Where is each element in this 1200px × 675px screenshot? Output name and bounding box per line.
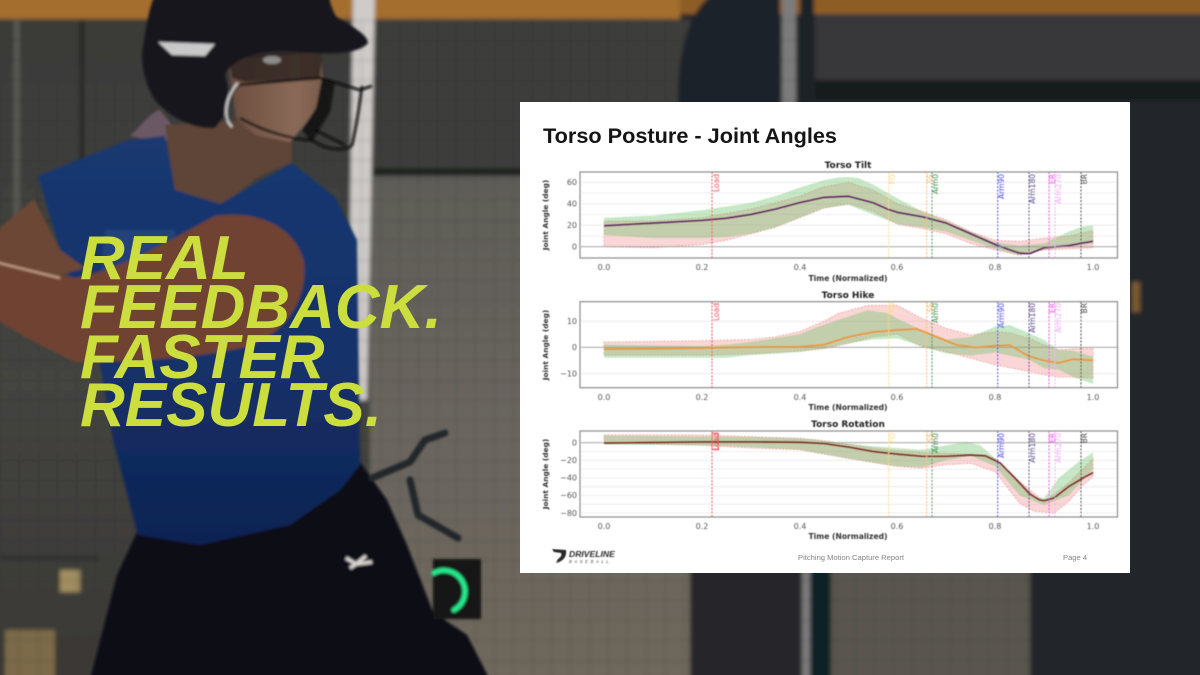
red band [604, 305, 1093, 378]
zero line [581, 346, 1117, 348]
headline line 3: FASTER [80, 323, 325, 392]
event labels: Arm180 [1028, 303, 1037, 333]
y tick labels: −40 [560, 474, 577, 482]
x tick labels: 0.8 [989, 393, 1001, 402]
chart: Torso Tilt [541, 161, 1118, 283]
neck [165, 120, 292, 204]
x tick labels [598, 263, 1099, 272]
headline line 2: FEEDBACK. [80, 273, 442, 342]
left arm [0, 199, 85, 275]
x tick labels: 0.2 [696, 522, 708, 531]
event labels: ER [1048, 174, 1057, 184]
x tick labels: 0.2 [696, 393, 708, 402]
mean line [604, 329, 1093, 363]
mean line [604, 442, 1093, 501]
event labels: ER [1048, 303, 1057, 313]
chart title: Torso Tilt [825, 161, 872, 171]
face guard [227, 78, 372, 149]
green band [604, 177, 1093, 255]
event lines [712, 302, 1081, 388]
y tick labels: −20 [560, 456, 577, 465]
red band [604, 435, 1093, 513]
green band [604, 310, 1093, 384]
event labels: Arm90 [997, 174, 1006, 199]
y tick labels: 40 [567, 200, 577, 208]
green ring [434, 570, 465, 610]
chart title: Torso Hike [822, 291, 874, 301]
event labels: Arm0 [931, 433, 940, 453]
gridlines [581, 321, 1117, 374]
event labels: Load [712, 174, 721, 192]
event labels: Arm0 [931, 303, 940, 323]
y axis label: Joint Angle (deg) [541, 310, 550, 381]
y tick labels: −60 [560, 491, 577, 500]
chart: Torso Hike [541, 291, 1118, 412]
y tick labels: 0 [572, 242, 577, 252]
event labels: BR [1080, 433, 1089, 443]
x tick labels: 0.4 [794, 522, 806, 531]
zero line [581, 246, 1117, 248]
gridlines [581, 182, 1117, 236]
load label box [712, 433, 718, 449]
headline line 1: REAL [80, 224, 249, 293]
y tick labels [560, 317, 577, 378]
event labels: BR [1080, 174, 1089, 184]
y tick labels: 0 [572, 438, 577, 448]
y tick labels: −10 [560, 370, 577, 378]
event labels: Arm180 [1028, 174, 1037, 204]
x tick labels: 1.0 [1087, 263, 1099, 272]
event labels: SS [926, 303, 935, 313]
chart title: Torso Rotation [811, 420, 885, 430]
x tick labels: 1.0 [1087, 393, 1099, 402]
right arm [0, 215, 304, 362]
event labels: Load [712, 433, 721, 451]
x tick labels: 0.6 [891, 522, 903, 531]
x tick labels: 0.4 [794, 393, 806, 402]
logo on shorts [346, 556, 372, 568]
event labels: Load [712, 303, 721, 321]
y tick labels: 20 [567, 221, 577, 230]
eye glint [263, 56, 281, 64]
pants [90, 462, 490, 675]
x tick labels: 0.8 [989, 522, 1001, 531]
footer logo [552, 549, 615, 564]
shirt print [100, 230, 175, 280]
headline line 4: RESULTS. [80, 371, 382, 440]
event lines [712, 172, 1081, 258]
x axis label: Time (Normalized) [808, 403, 888, 412]
event labels: FO [888, 174, 897, 184]
event labels: Arm180 [1028, 433, 1037, 463]
logo subline: BASEBALL [569, 559, 611, 564]
zero line [581, 442, 1117, 444]
y tick labels: 10 [567, 317, 577, 326]
event labels: Arm0 [931, 174, 940, 194]
event labels: Arm270 [1054, 433, 1063, 463]
x tick labels [598, 393, 1099, 402]
y tick labels: −80 [560, 509, 577, 518]
event labels: SS [926, 433, 935, 443]
x tick labels: 0.0 [598, 393, 610, 402]
arm highlight [0, 262, 60, 278]
x tick labels: 0.4 [794, 263, 806, 272]
y tick labels: 60 [567, 178, 577, 187]
headline [80, 224, 442, 440]
x tick labels [598, 522, 1099, 531]
x tick labels: 0.0 [598, 263, 610, 272]
event labels: Arm270 [1054, 303, 1063, 333]
chart: Torso Rotation [541, 420, 1118, 541]
event labels: SS [926, 174, 935, 184]
axes frame [580, 431, 1118, 517]
page number: Page 4 [1063, 553, 1087, 562]
helmet [142, 0, 368, 128]
face [228, 52, 324, 142]
event labels [712, 433, 1089, 463]
event labels: FO [888, 303, 897, 313]
x tick labels: 0.2 [696, 263, 708, 272]
y tick labels [560, 438, 577, 518]
data bands and mean [604, 435, 1093, 513]
x axis label: Time (Normalized) [808, 274, 888, 283]
y axis label: Joint Angle (deg) [541, 180, 550, 251]
event labels: BR [1080, 303, 1089, 313]
white card [520, 102, 1130, 573]
event labels: ER [1048, 433, 1057, 443]
mean line [604, 196, 1093, 254]
event labels [712, 174, 1089, 204]
helmet logo plate [158, 42, 215, 56]
report page panel [520, 102, 1130, 573]
helmet strap [302, 78, 335, 142]
x axis label: Time (Normalized) [808, 532, 888, 541]
axes frame [580, 172, 1118, 258]
x tick labels: 0.8 [989, 263, 1001, 272]
event labels: Arm90 [997, 303, 1006, 328]
axes frame [580, 302, 1118, 388]
gridlines [581, 452, 1117, 513]
x tick labels: 0.6 [891, 393, 903, 402]
sensor box [433, 559, 481, 619]
guard clip [226, 83, 238, 127]
logo wordmark: DRIVELINE [569, 549, 615, 559]
data bands and mean [604, 305, 1093, 384]
hair [130, 110, 172, 145]
eye shadow [228, 50, 322, 82]
y axis label: Joint Angle (deg) [541, 439, 550, 510]
y tick labels [567, 178, 577, 252]
camera mount [372, 433, 458, 538]
x tick labels: 0.0 [598, 522, 610, 531]
x tick labels: 0.6 [891, 263, 903, 272]
athlete in helmet and blue shirt [0, 0, 490, 675]
event labels [712, 303, 1089, 333]
event labels: Arm270 [1054, 174, 1063, 204]
logo mark [552, 549, 566, 563]
event labels: Arm90 [997, 433, 1006, 458]
red band [604, 182, 1093, 255]
green band [604, 436, 1093, 505]
data bands and mean [604, 177, 1093, 255]
event lines [712, 431, 1081, 517]
report title: Torso Posture - Joint Angles [543, 125, 837, 148]
blue shirt [38, 136, 360, 545]
x tick labels: 1.0 [1087, 522, 1099, 531]
footer report name: Pitching Motion Capture Report [798, 553, 905, 562]
y tick labels: 0 [572, 343, 577, 352]
event labels: FO [888, 433, 897, 443]
